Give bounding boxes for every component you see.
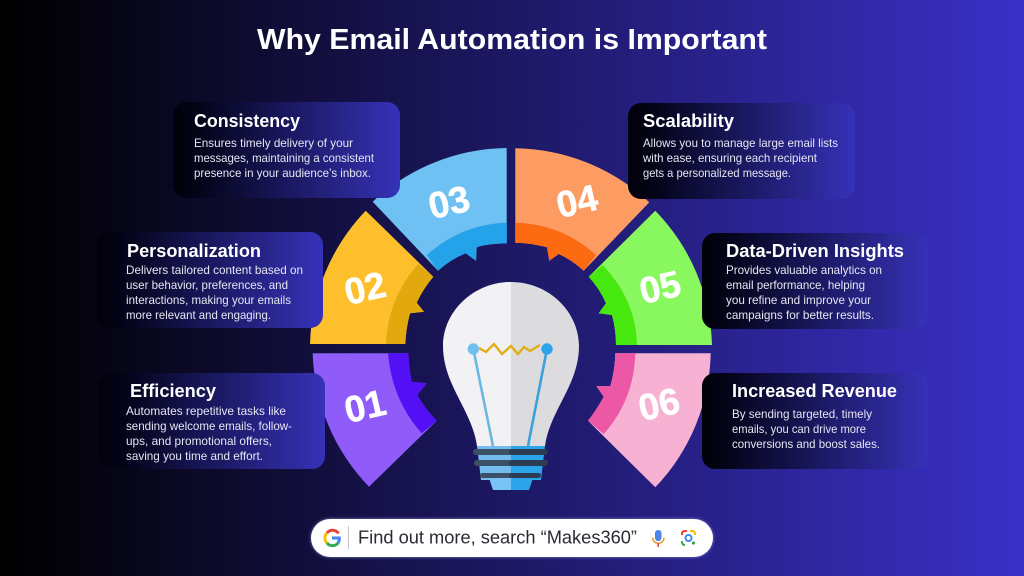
card: Consistency [173,102,400,198]
card: Efficiency: ups, and promotional offers, [126,434,272,448]
segment 05: green [589,211,712,345]
card: Consistency: presence in your audience’s inbox. [194,166,371,180]
icon: Google G [325,530,339,546]
card: Personalization: Delivers tailored content based on [126,263,303,277]
segment 03: light blue: 03 [424,178,474,227]
segment 02: yellow: 02 [340,264,390,313]
card: Efficiency: sending welcome emails, follow- [126,419,292,433]
card: Data-Driven Insights [702,233,928,329]
segment 02: yellow [310,211,433,344]
card: Increased Revenue: Increased Revenue [732,380,897,401]
title: Why Email Automation is Important [257,24,767,56]
card: Data-Driven Insights: campaigns for better results. [726,308,874,322]
card: Increased Revenue [702,373,928,469]
segment 01: purple [313,353,437,487]
card: Personalization: user behavior, preferences, and [126,278,288,292]
search bar [311,519,713,557]
card: Efficiency [99,373,325,469]
segment 04: orange: 04 [552,177,602,226]
segment 03: light blue [373,148,507,271]
card: Efficiency: Efficiency [130,380,217,401]
search bar: Find out more, search “Makes360” [358,528,637,548]
segment 01: purple: 01 [340,382,390,431]
card: Consistency: messages, maintaining a consistent [194,151,375,165]
card: Scalability: Allows you to manage large email lists [643,136,838,150]
card: Personalization [97,232,323,328]
card: Consistency: Ensures timely delivery of your [194,136,353,150]
card: Scalability [628,103,855,199]
card: Increased Revenue: conversions and boost sales. [732,437,880,451]
segment 06: pink: 06 [634,380,684,429]
icon: lens [682,531,695,545]
segment 06: pink [588,353,711,487]
card: Data-Driven Insights: email performance, helping [726,278,865,292]
card: Data-Driven Insights: you refine and improve your [726,293,871,307]
card: Personalization: more relevant and engaging. [126,308,271,322]
card: Scalability: gets a personalized message. [643,166,791,180]
segment 04: orange [515,148,649,271]
card: Data-Driven Insights: Data-Driven Insights [726,240,904,261]
segment 05: green: 05 [635,263,685,312]
card: Data-Driven Insights: Provides valuable analytics on [726,263,882,277]
card: Personalization: Personalization [127,240,261,261]
card: Efficiency: saving you time and effort. [126,449,263,463]
card: Increased Revenue: By sending targeted, timely [732,407,872,421]
light bulb [443,282,579,490]
card: Increased Revenue: emails, you can drive more [732,422,866,436]
card: Scalability: Scalability [643,110,735,131]
card: Personalization: interactions, making your emails [126,293,291,307]
card: Consistency: Consistency [194,110,301,131]
card: Scalability: with ease, ensuring each recipient [642,151,818,165]
card: Efficiency: Automates repetitive tasks like [126,404,286,418]
icon: microphone [652,530,664,547]
